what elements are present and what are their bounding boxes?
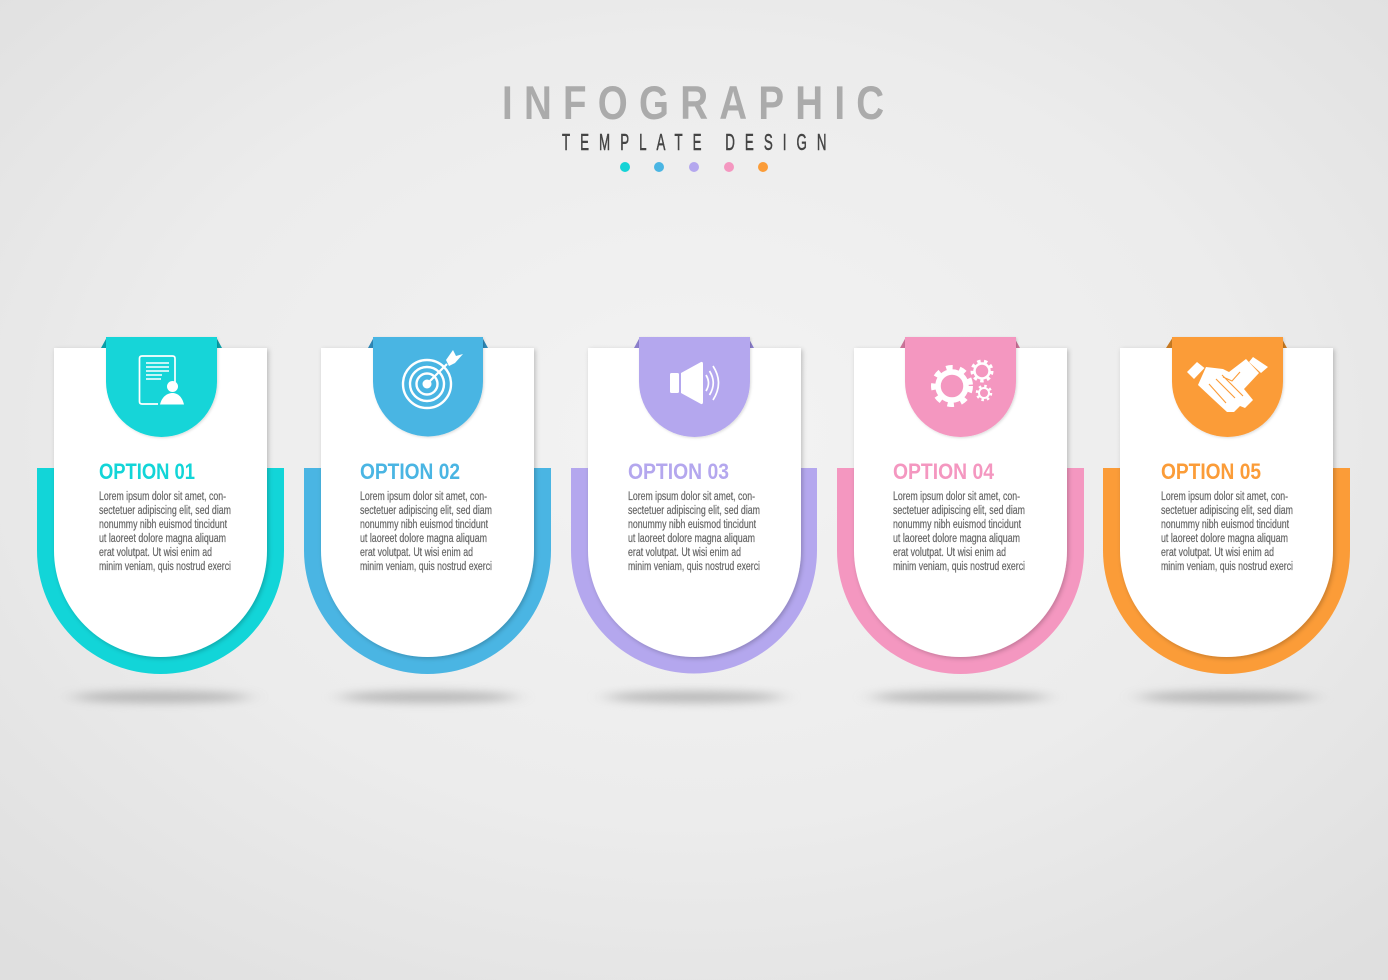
- text block: minim veniam, quis nostrud exerci: [360, 561, 492, 573]
- text block: nonummy nibh euismod tincidunt: [893, 519, 1022, 531]
- text block: minim veniam, quis nostrud exerci: [1161, 561, 1293, 573]
- heading: OPTION 04: OPTION 04: [893, 459, 995, 484]
- colour dots: [620, 162, 768, 172]
- text block: nonummy nibh euismod tincidunt: [99, 519, 228, 531]
- text block: nonummy nibh euismod tincidunt: [628, 519, 757, 531]
- heading: OPTION 02: OPTION 02: [360, 459, 460, 484]
- text block: sectetuer adipiscing elit, sed diam: [1161, 505, 1293, 517]
- text block: minim veniam, quis nostrud exerci: [99, 561, 231, 573]
- heading: OPTION 05: OPTION 05: [1161, 459, 1261, 484]
- icon: document with person: [140, 356, 184, 404]
- panel: option 04: [837, 337, 1084, 703]
- icon: handshake: [1187, 357, 1268, 412]
- panel: option 01: [37, 337, 284, 703]
- text block: erat volutpat. Ut wisi enim ad: [99, 547, 212, 559]
- text block: sectetuer adipiscing elit, sed diam: [893, 505, 1025, 517]
- text block: erat volutpat. Ut wisi enim ad: [360, 547, 473, 559]
- heading: INFOGRAPHIC: INFOGRAPHIC: [502, 77, 884, 130]
- icon: gears: [934, 361, 992, 404]
- panel: option 03: [571, 337, 817, 703]
- text block: [628, 491, 760, 573]
- text block: Lorem ipsum dolor sit amet, con-: [893, 491, 1020, 503]
- text block: ut laoreet dolore magna aliquam: [893, 533, 1020, 545]
- text block: [360, 491, 492, 573]
- text block: [99, 491, 231, 573]
- icon: speaker: [670, 362, 718, 404]
- text block: [893, 491, 1025, 573]
- panel: option 05: [1103, 337, 1350, 703]
- text block: Lorem ipsum dolor sit amet, con-: [628, 491, 755, 503]
- text block: Lorem ipsum dolor sit amet, con-: [360, 491, 487, 503]
- text block: erat volutpat. Ut wisi enim ad: [893, 547, 1006, 559]
- panel: option 02: [304, 337, 551, 703]
- subheading: TEMPLATE DESIGN: TEMPLATE DESIGN: [562, 129, 826, 155]
- icon: target with arrow: [403, 350, 463, 408]
- text block: ut laoreet dolore magna aliquam: [628, 533, 755, 545]
- text block: sectetuer adipiscing elit, sed diam: [628, 505, 760, 517]
- text block: [1161, 491, 1293, 573]
- text block: minim veniam, quis nostrud exerci: [893, 561, 1025, 573]
- text block: erat volutpat. Ut wisi enim ad: [1161, 547, 1274, 559]
- text block: nonummy nibh euismod tincidunt: [360, 519, 489, 531]
- title: [502, 77, 884, 172]
- text block: minim veniam, quis nostrud exerci: [628, 561, 760, 573]
- heading: OPTION 01: OPTION 01: [99, 459, 195, 484]
- heading: OPTION 03: OPTION 03: [628, 459, 729, 484]
- text block: sectetuer adipiscing elit, sed diam: [360, 505, 492, 517]
- text block: ut laoreet dolore magna aliquam: [99, 533, 226, 545]
- text block: sectetuer adipiscing elit, sed diam: [99, 505, 231, 517]
- text block: nonummy nibh euismod tincidunt: [1161, 519, 1290, 531]
- text block: ut laoreet dolore magna aliquam: [360, 533, 487, 545]
- text block: erat volutpat. Ut wisi enim ad: [628, 547, 741, 559]
- text block: Lorem ipsum dolor sit amet, con-: [99, 491, 226, 503]
- text block: ut laoreet dolore magna aliquam: [1161, 533, 1288, 545]
- text block: Lorem ipsum dolor sit amet, con-: [1161, 491, 1288, 503]
